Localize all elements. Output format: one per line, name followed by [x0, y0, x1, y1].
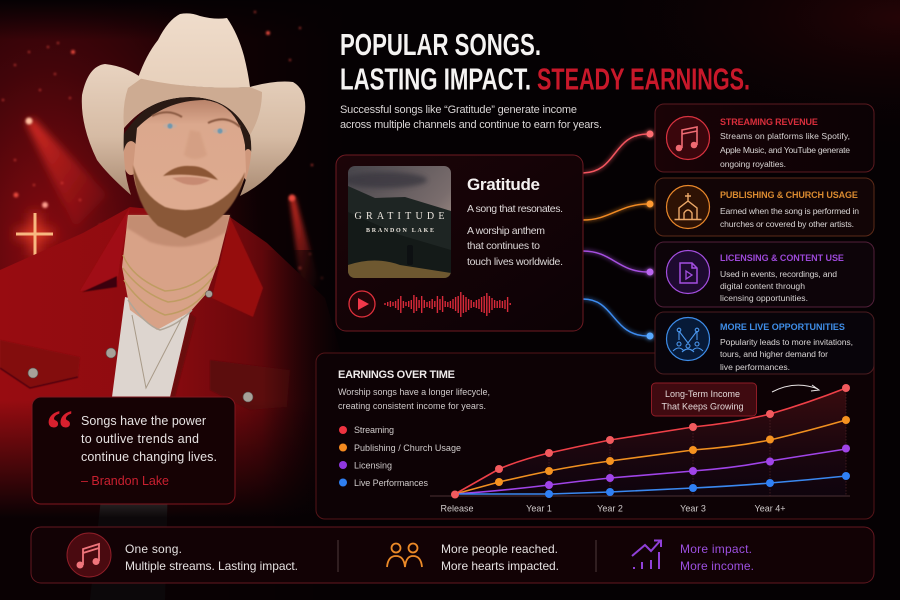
title: STEADY EARNINGS.	[537, 62, 750, 96]
panel: licensing and content use: LICENSING & CONTENT USE	[720, 253, 844, 263]
song description: A song that resonates.	[467, 203, 563, 215]
eyes	[163, 123, 227, 134]
quote text: continue changing lives.	[81, 450, 217, 464]
lower portrait fade	[0, 407, 320, 518]
icon: glowing cross	[16, 213, 53, 255]
callout: Long-Term Income	[665, 389, 740, 399]
intro text	[340, 104, 602, 131]
panel: streaming revenue: Streams on platforms like Spotify,	[720, 131, 850, 141]
panel: publishing and church usage	[655, 178, 874, 236]
buttons	[28, 290, 253, 402]
takeaway: more people: More people reached.	[441, 542, 558, 556]
takeaway: more impact: More income.	[680, 559, 754, 573]
panel: earnings over time	[316, 353, 874, 519]
shirt	[100, 297, 190, 517]
panel: song card	[336, 155, 583, 331]
takeaway: more impact: More impact.	[680, 542, 752, 556]
intro text: Successful songs like “Gratitude” generate income	[340, 104, 577, 116]
takeaway: one song: One song.	[125, 542, 182, 556]
quote box	[32, 397, 235, 504]
hair under brim	[124, 97, 252, 170]
description: Worship songs have a longer lifecycle,	[338, 387, 490, 397]
song description: that continues to	[467, 240, 540, 252]
song description: touch lives worldwide.	[467, 256, 563, 268]
icon: growth chart	[632, 540, 661, 569]
jacket pockets and collar	[0, 207, 290, 410]
description: creating consistent income for years.	[338, 401, 486, 411]
panel: more live opportunities: MORE LIVE OPPORTUNITIES	[720, 322, 845, 332]
moustache	[163, 166, 218, 180]
title: LASTING IMPACT.	[340, 62, 531, 96]
panel: streaming revenue: ongoing royalties.	[720, 159, 786, 169]
legend: Licensing	[354, 460, 392, 470]
title: POPULAR SONGS.	[340, 27, 541, 62]
icon: connected audience	[666, 318, 710, 360]
attribution: – Brandon Lake	[81, 474, 169, 488]
connector: streaming	[583, 130, 654, 173]
takeaway: more people	[441, 542, 559, 573]
axis labels: Year 2	[597, 504, 623, 514]
mouth	[172, 177, 210, 185]
panel: more live opportunities: Popularity leads to more invitations,	[720, 337, 853, 347]
stage lights and particles	[2, 11, 323, 295]
album cover: GRATITUDE	[354, 211, 444, 222]
axis labels: Year 1	[526, 504, 552, 514]
hat crown	[138, 13, 250, 88]
panel: more live opportunities: tours, and higher demand for	[720, 349, 828, 359]
neck shadow	[127, 215, 230, 247]
panel: publishing and church usage: PUBLISHING & CHURCH USAGE	[720, 190, 858, 200]
panel: bottom takeaway bar	[31, 527, 874, 583]
legend: Streaming	[354, 425, 394, 435]
quote text	[81, 414, 217, 464]
takeaway: one song	[125, 542, 298, 573]
panel: licensing and content use: Used in events, recordings, and	[720, 269, 837, 279]
line chart	[430, 384, 850, 498]
panel: licensing and content use	[655, 242, 874, 307]
beard	[133, 165, 245, 238]
song description: A worship anthem	[467, 225, 545, 237]
icon: people	[387, 544, 422, 567]
jacket	[0, 207, 328, 513]
icon: music note	[666, 116, 710, 160]
title	[340, 27, 750, 96]
icon: media file	[666, 250, 710, 294]
album cover	[343, 166, 451, 278]
callout: That Keeps Growing	[661, 402, 744, 412]
icon: music note badge	[67, 533, 111, 577]
icon: church	[666, 186, 710, 228]
legend: Publishing / Church Usage	[354, 443, 461, 453]
description	[338, 387, 490, 411]
icon: quotation mark: “	[46, 399, 73, 459]
panel: licensing and content use: licensing opportunities.	[720, 293, 808, 303]
face	[133, 100, 246, 211]
legend	[339, 425, 461, 488]
nose	[186, 132, 206, 158]
axis labels: Release	[440, 504, 474, 514]
axis labels: Year 4+	[755, 504, 785, 514]
song description	[467, 203, 563, 268]
portrait of Brandon Lake	[0, 13, 345, 600]
panel: streaming revenue: Apple Music, and YouTube generate	[720, 145, 850, 155]
brim underside band	[124, 78, 262, 135]
neck	[122, 215, 230, 330]
legend: Live Performances	[354, 478, 428, 488]
panel: streaming revenue	[655, 104, 874, 172]
panel: publishing and church usage: Earned when the song is performed in	[720, 206, 859, 216]
eyebrows	[152, 112, 240, 127]
intro text: across multiple channels and continue to earn for years.	[340, 119, 602, 131]
quote text: Songs have the power	[81, 414, 206, 428]
axis labels	[440, 504, 785, 514]
arrow	[772, 385, 819, 392]
connector: live	[583, 299, 654, 340]
album cover: BRANDON LAKE	[366, 228, 434, 234]
axis labels: Year 3	[680, 504, 706, 514]
quote text: to outlive trends and	[81, 432, 199, 446]
panel: licensing and content use: digital content through	[720, 281, 805, 291]
panel: publishing and church usage: churches or covered by other artists.	[720, 219, 854, 229]
hat brim	[82, 64, 305, 196]
panel: more live opportunities: live performances.	[720, 362, 790, 372]
necklaces	[123, 255, 217, 388]
panel: streaming revenue: STREAMING REVENUE	[720, 117, 818, 127]
connector: licensing	[583, 251, 654, 276]
ears	[123, 141, 254, 181]
takeaway: more impact	[680, 542, 754, 573]
panel: more live opportunities	[655, 312, 874, 374]
icon: play button	[349, 291, 375, 317]
takeaway: more people: More hearts impacted.	[441, 559, 559, 573]
waveform	[385, 292, 510, 317]
song title: Gratitude	[467, 175, 540, 194]
callout	[652, 383, 756, 416]
connector: publishing	[583, 200, 654, 220]
heading: EARNINGS OVER TIME	[338, 369, 455, 381]
takeaway: one song: Multiple streams. Lasting impact.	[125, 559, 298, 573]
